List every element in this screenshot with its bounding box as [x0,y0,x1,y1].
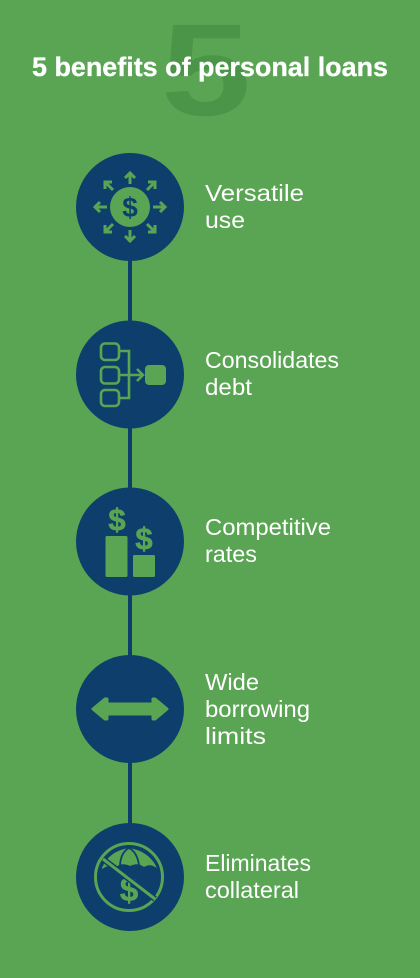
timeline connector [128,207,132,877]
item: competitive rates [76,488,331,596]
label: limits [205,723,266,749]
label [205,514,331,567]
icon: double-headed arrow [76,655,184,763]
item: versatile use [76,153,304,261]
title: 5 benefits of personal loans [32,52,388,82]
label: rates [205,541,257,567]
label [205,180,304,233]
watermark numeral 5: 5 [161,0,251,143]
label: Wide [205,669,259,695]
icon: crossed-out umbrella and dollar: $ [120,871,138,908]
icon: dollar bars [76,488,184,596]
icon: dollar bars: $ [108,502,126,537]
label [205,850,311,903]
item: eliminates collateral [76,823,311,931]
label: debt [205,374,253,400]
label: use [205,207,245,233]
icon: crossed-out umbrella and dollar [76,823,184,931]
label: collateral [205,877,299,903]
label: Competitive [205,514,331,540]
item: wide borrowing limits [76,655,310,763]
item: consolidates debt [76,320,339,428]
icon: money with outward arrows: $ [122,192,138,223]
icon: money with outward arrows [76,153,184,261]
label [205,347,339,400]
label: Versatile [205,180,304,206]
label: Eliminates [205,850,311,876]
icon: three boxes merging into one [76,320,184,428]
label [205,669,310,749]
icon: dollar bars: $ [135,521,153,556]
label: borrowing [205,696,310,722]
label: Consolidates [205,347,339,373]
